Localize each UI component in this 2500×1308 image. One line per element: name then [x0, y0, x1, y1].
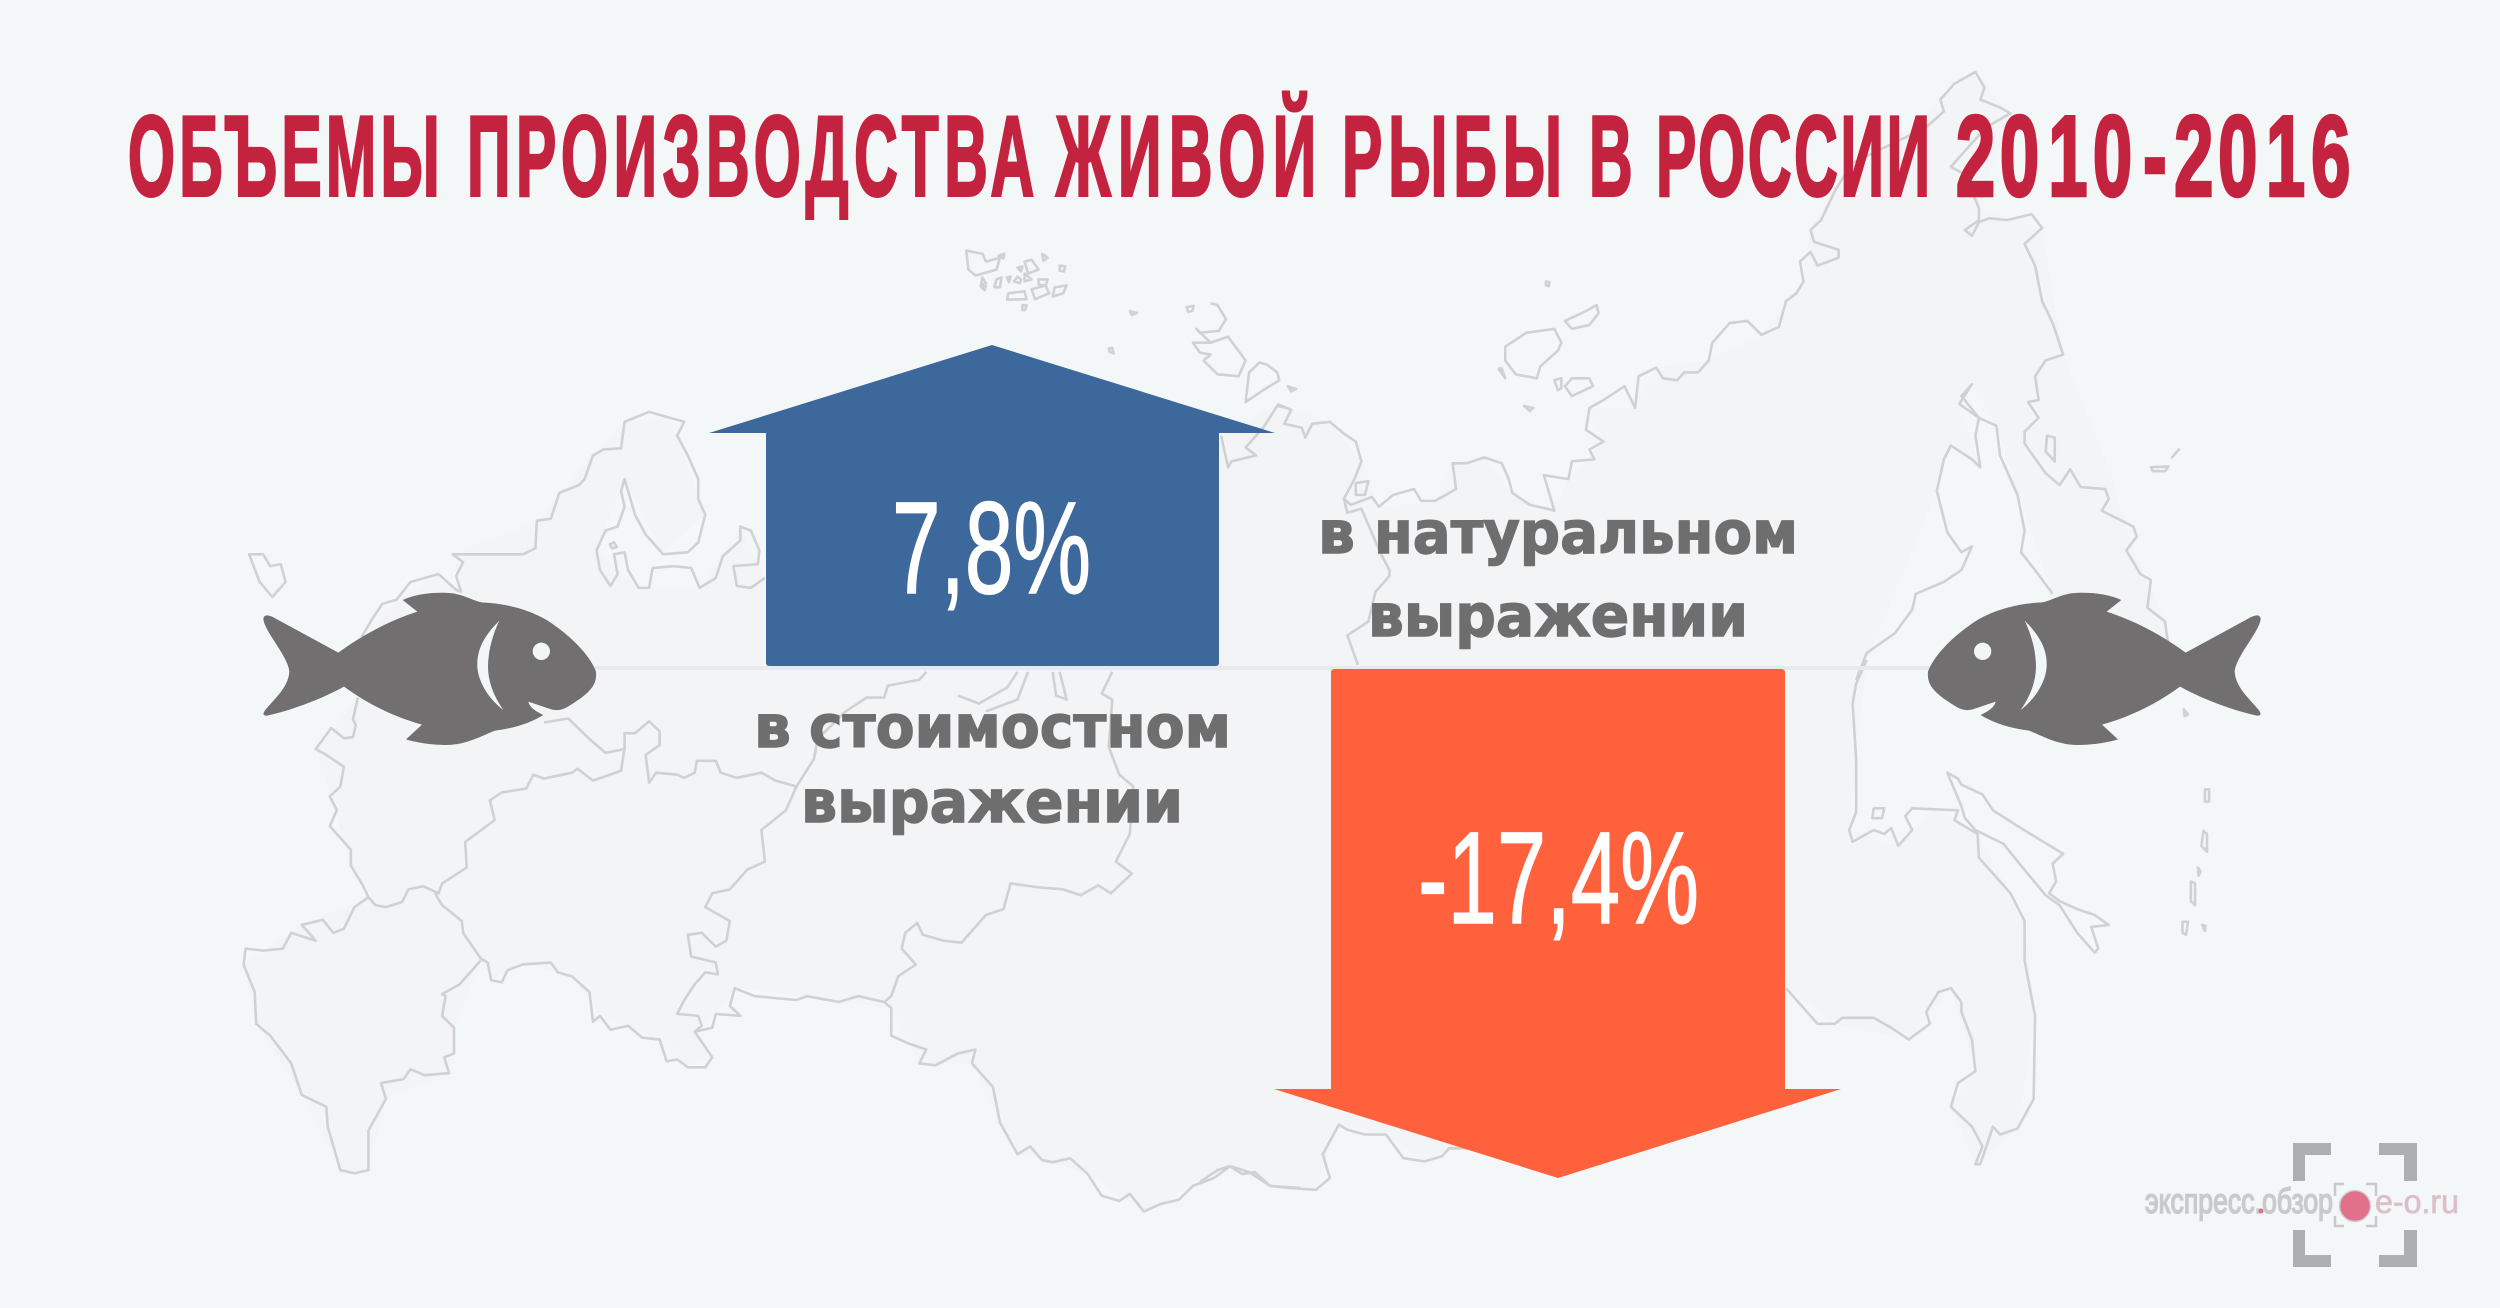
label: physical terms — [1318, 498, 1798, 650]
icon: right fish — [1928, 593, 2261, 745]
logo text: domain: e-o.ru — [2375, 1183, 2459, 1220]
map: north-east coast and Chukotka — [1277, 72, 2179, 680]
horizontal axis line — [560, 666, 1980, 670]
down arrow: physical terms — [1274, 669, 1841, 1178]
logo watermark — [2145, 1143, 2459, 1267]
title: ПРОИЗВОДСТВА — [467, 93, 1034, 220]
map: north-west coast — [249, 251, 1296, 637]
label: value terms: стоимостном — [809, 692, 1231, 761]
value: -17,4%: -17,4% — [1418, 804, 1699, 951]
label: value terms: выражении — [801, 767, 1183, 836]
value: 7,8%: 7,8% — [892, 474, 1091, 621]
title: ОБЪЕМЫ — [128, 93, 440, 220]
up arrow: value terms — [709, 345, 1275, 666]
title: В — [1589, 93, 1633, 220]
title: ЖИВОЙ — [1055, 92, 1316, 220]
map of Russia background — [243, 72, 2209, 1212]
label: value terms: в — [754, 692, 791, 761]
title — [128, 92, 2350, 221]
title: РЫБЫ — [1342, 93, 1562, 220]
label: physical terms: в — [1318, 498, 1355, 567]
title: 2010-2016 — [1956, 93, 2350, 221]
map: south-west borders — [244, 672, 1300, 1212]
icon: left fish — [263, 593, 596, 745]
logo text: Russian name: экспресс.обзор — [2145, 1182, 2333, 1221]
title: РОССИИ — [1656, 93, 1930, 220]
label: physical terms: натуральном — [1374, 498, 1798, 567]
label: physical terms: выражении — [1368, 581, 1748, 650]
map: south-east coast and Sakhalin — [1200, 660, 2209, 1190]
label: value terms — [754, 692, 1231, 836]
